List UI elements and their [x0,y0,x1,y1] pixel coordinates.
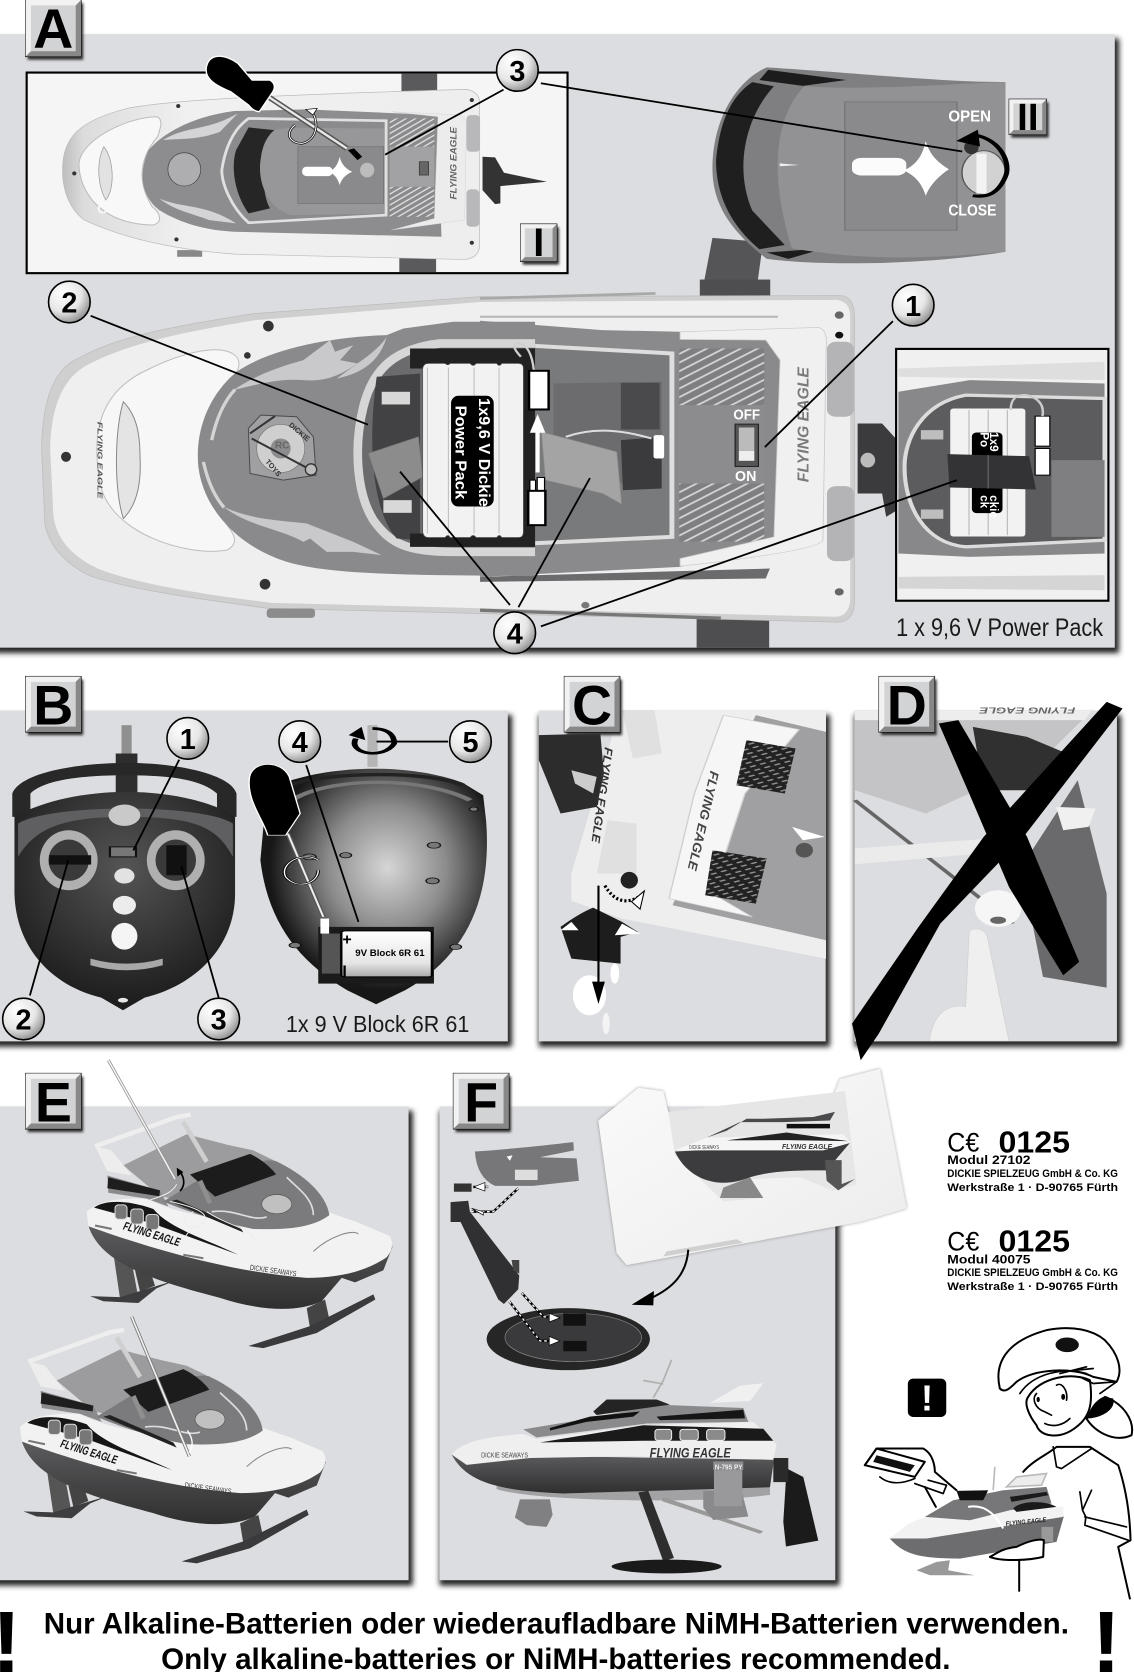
bow deck, cockpit and battery: TOYS [263,457,283,478]
inset: strap over power pack [896,349,1108,601]
plate II [1009,96,1049,139]
text: FLYING EAGLE on stand boat: FLYING EAGLE [650,1445,731,1461]
panel A: battery installation [0,34,1119,654]
dashed assembly arrows [472,1182,560,1345]
text: N-795 PY: N-795 PY [715,1464,743,1471]
connectors and insertion arrow [514,343,549,525]
face [1026,1376,1091,1435]
battery label: 9V Block 6R 61 [355,948,425,959]
text: FLYING EAGLE on stern: FLYING EAGLE [588,746,615,845]
face details [1020,1367,1117,1425]
hull top surface [50,300,850,617]
conformity block 27102: Werkstraße 1 · D-90765 Fürth [947,1182,1118,1194]
cap dome [998,1328,1119,1391]
conformity block 40075 [947,1224,1118,1293]
conformity block 27102: Modul 27102 [947,1154,1031,1167]
cap brim at the back [1087,1397,1132,1438]
battery label [342,931,425,980]
label fragments seen around the strap [977,432,1000,518]
plate D: D [887,674,927,736]
icon: warning exclamation box: ! [921,1378,933,1419]
callout 4: 4 [507,618,523,650]
bow deck, cockpit and battery [61,321,535,618]
callout 3 [198,998,239,1040]
label fragments seen around the strap: ckie [987,495,1000,518]
plate E: E [35,1071,72,1133]
plate B [26,674,83,736]
bow deck, cockpit and battery: FLYING EAGLE [95,422,104,500]
upper boat with loose antenna [87,1060,393,1348]
conformity block 40075: Modul 40075 [947,1253,1031,1266]
plate II: II [1017,96,1039,139]
plate D [879,674,937,736]
hull outline [42,296,855,622]
callout 2: 2 [15,1005,31,1037]
inset I: open the hatch with a screwdriver [27,56,568,273]
conformity block 27102: 0125 [999,1124,1070,1159]
conformity block 27102 [947,1124,1118,1194]
arrow: curved to base [632,1250,688,1305]
callout 1: 1 [180,724,196,756]
plate E [26,1071,83,1133]
text: FLYING EAGLE upper: FLYING EAGLE [122,1220,182,1249]
label fragments seen around the strap: Po [977,432,990,447]
text: FLYING EAGLE on transom: FLYING EAGLE [796,366,813,482]
panel F: stand assembly [440,1069,907,1586]
remote control front [12,725,237,1010]
battery label text: Power Pack [452,405,469,500]
stand post [702,67,1007,295]
text: OPEN: OPEN [948,109,991,126]
callout 4 [279,721,321,762]
callout 4 [494,612,536,654]
callout 1: 1 [905,291,921,323]
callout 2: 2 [61,288,77,320]
callout 3: 3 [509,56,525,88]
plate A [26,0,83,60]
label fragments seen around the strap: 1x9 [987,432,1000,452]
panel C: draining water [539,710,830,1047]
text: DICKIE SEAWAYS in cradle: DICKIE SEAWAYS [689,1145,719,1151]
leader lines, panel A [91,83,962,626]
bow deck, cockpit and battery: DICKIE [287,420,312,443]
callout 2 [49,281,90,323]
plate B: B [33,674,73,736]
icon: screwdriver with rotation arrow [206,56,362,160]
foam cradle with boat [598,1069,907,1265]
icon: warning exclamation box [908,1378,946,1419]
plate C [564,674,622,736]
assembled boat on stand [452,1360,818,1573]
cartoon boy with battery and boat [865,1328,1132,1599]
text: DICKIE SEAWAYS lower: DICKIE SEAWAYS [184,1480,232,1496]
text: CLOSE: CLOSE [948,203,996,220]
label fragments seen around the strap: ck [977,495,990,509]
text: OFF: OFF [733,406,760,423]
text: 1 x 9 V Block 6R 61: 1x 9 V Block 6R 61 [286,1011,469,1037]
plate C: C [572,674,612,736]
small boat top view [63,73,547,272]
leader lines, panel B [30,742,448,998]
text: FLYING EAGLE on small boat: FLYING EAGLE [1005,1517,1047,1528]
conformity block 27102: C€ [947,1127,979,1157]
warning text German: Nur Alkaline-Batterien oder wiederaufladbare NiMH-Batterien verwenden. [44,1608,1069,1641]
plate I: I [533,221,544,265]
battery label: I [342,963,347,980]
text: ON: ON [735,468,756,485]
callout 1 [892,284,934,326]
battery pack in hand [865,1449,957,1507]
panel D: do not touch the propeller [855,705,1121,1047]
base plate [487,1308,650,1370]
callout 5: 5 [462,727,478,759]
text: FLYING EAGLE: FLYING EAGLE [449,126,460,200]
conformity block 40075: C€ [947,1227,979,1257]
callout 4: 4 [292,727,308,759]
text: DICKIE SEAWAYS upper: DICKIE SEAWAYS [249,1263,297,1278]
lower boat with antenna fitted [20,1317,326,1563]
callout 3: 3 [211,1005,227,1037]
text: OPEN: OPEN [97,200,138,217]
icon: drain plug arrows [592,886,644,1004]
callout 2 [3,998,44,1040]
panel B: transmitter [0,711,512,1047]
text: 1 x 9,6 V Power Pack: 1 x 9,6 V Power Pack [896,615,1104,642]
big black X over panel D [852,702,1123,1060]
text: DICKIE SEAWAYS on stand boat: DICKIE SEAWAYS [481,1451,528,1460]
conformity block 40075: 0125 [999,1224,1070,1259]
cap logo [1056,1337,1079,1352]
callout 1 [167,718,209,759]
main boat top view with battery installed [42,280,897,648]
stand bracket [451,1142,579,1304]
panel E: antenna mounting [0,1060,413,1586]
bow deck, cockpit and battery: RC [275,440,289,451]
stand straps [697,280,770,648]
callout 5 [450,721,491,762]
aft deck, hatches, bumpers, switch [480,293,897,618]
callout 3 [497,50,538,91]
plate F: F [464,1071,498,1133]
remote control back with 9 V block [249,725,487,1004]
part II: hatch lock close-up [702,67,1007,295]
battery label text [452,398,492,507]
plate I [521,221,559,265]
conformity block 40075: Werkstraße 1 · D-90765 Fürth [947,1281,1118,1293]
boat held by the boy [890,1467,1064,1575]
battery label text: 1x9,6 V Dickie [475,398,492,507]
text: FLYING EAGLE on boat: FLYING EAGLE [979,705,1075,715]
shirt and arms [1019,1447,1131,1599]
battery label: + [342,931,352,948]
text: FLYING EAGLE lower: FLYING EAGLE [59,1437,120,1467]
plate F [453,1071,511,1133]
hand with remote [990,1540,1044,1560]
text: FLYING EAGLE on boat: FLYING EAGLE [685,770,722,872]
text: FLYING EAGLE in cradle: FLYING EAGLE [782,1142,833,1151]
